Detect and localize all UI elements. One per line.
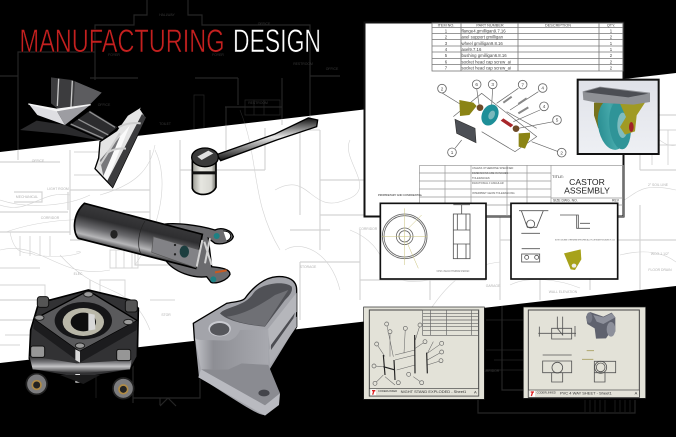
floor plan room labels on white band: BUILDING: [612, 107, 628, 111]
drawing panel: wheel detail: [380, 203, 486, 279]
assembly drawing sheet: PROPRIETARY AND CONFIDENTIAL: [378, 193, 423, 197]
parts table: 2: [610, 60, 613, 64]
diagonal white band: [0, 73, 676, 363]
title block text: CASTOR: [569, 177, 605, 187]
wheel notes: NOTES: UNLESS OTHERWISE SPECIFIED: [437, 271, 470, 273]
balloon numbers: 1: [451, 150, 454, 155]
title block text: SIZE DWG. NO.: [553, 198, 578, 202]
bearing bore: [55, 302, 112, 339]
tool barrel cross hole: [110, 230, 118, 239]
exploded castor view: [438, 80, 566, 157]
floor plan room labels on white band: GARAGE: [486, 284, 501, 288]
bearing mounting holes: [35, 292, 133, 348]
sheet footer: A: [474, 389, 477, 394]
floor plan room labels on white band: STORAGE: [300, 265, 317, 269]
sheet background: [523, 307, 646, 398]
floor plan on white band: [0, 114, 676, 346]
tool barrel: [74, 203, 202, 268]
3D model: long gripper tool: [74, 203, 233, 283]
explosion lines: [440, 88, 558, 152]
balloon numbers: 3: [491, 82, 494, 87]
sheet footer: [369, 389, 479, 396]
balloon numbers: 2: [441, 86, 444, 91]
parts table: 2: [610, 53, 613, 58]
bracket front view: [519, 211, 548, 233]
parts table: QTY.: [607, 24, 615, 28]
title block text: INTERPRET GEOM TOLERANCING: [472, 191, 515, 195]
drawing panel: exploded stand: [364, 307, 484, 399]
floor plan room labels on white band: LIGHT ROOM: [47, 187, 69, 191]
plow blade: [95, 96, 147, 187]
bracket bottom view: [522, 249, 540, 262]
sheet footer: [528, 390, 639, 397]
plow bucket back: [51, 77, 102, 111]
callout balloons: [438, 80, 566, 157]
bushing left: [477, 104, 483, 111]
sheet footer: A: [635, 390, 638, 395]
teal wheel tyre: [595, 98, 631, 152]
teal wheel part: [478, 102, 502, 128]
parts table: 7: [445, 66, 448, 70]
floor plan room labels on white band: 2" SOIL LINE: [648, 183, 669, 187]
bearing wheels: [26, 374, 134, 399]
parts table: 3: [445, 41, 448, 46]
parts table: socket head cap screw_ai: [462, 60, 511, 64]
floor plan room labels on black: HALLWAY: [159, 13, 176, 17]
floor plan room labels on black: CORRIDOR: [481, 369, 500, 373]
red axle: [629, 122, 634, 132]
pipe fitting front view: [543, 355, 572, 382]
ratchet head cylinder: [192, 160, 216, 194]
floor plan room labels on white band: OFFICE: [32, 159, 45, 163]
sheet inner border: [369, 310, 479, 396]
balloon numbers: [441, 82, 563, 155]
floor plan room labels on white band: FLOOR DRAIN: [648, 268, 672, 272]
ratchet handle: [217, 118, 318, 161]
3D model: bearing block: [26, 290, 138, 399]
bracket pocket: [220, 283, 292, 327]
axle support part left: [459, 100, 477, 116]
sheet inner border: [528, 310, 639, 397]
bearing bolts: [31, 297, 137, 361]
left bracket: [594, 103, 610, 129]
title block text: TOLERANCES:: [472, 176, 491, 180]
exploded stand drawing: [374, 324, 442, 385]
title block text: ASSEMBLY: [564, 186, 610, 196]
bracket side ribs: [268, 293, 297, 347]
plow bucket front: [28, 103, 65, 125]
sheet footer: PVC 4 WAY SHEET - Sheet1: [560, 390, 612, 395]
yellow bracket render: [564, 249, 581, 270]
balloon numbers: 4: [541, 86, 544, 91]
title block text: [472, 166, 620, 202]
title block text: UNLESS OTHERWISE SPECIFIED:: [472, 166, 514, 170]
red axle part: [501, 118, 513, 127]
sheet background: [364, 307, 484, 399]
parts table: 1: [445, 28, 448, 34]
socket screws: [503, 97, 528, 113]
bracket front walls: [195, 329, 268, 369]
title block text: REV: [612, 198, 620, 202]
floor plan room labels on white band: [16, 107, 672, 317]
bracket body: [193, 277, 297, 416]
parts table: 2: [445, 34, 448, 40]
balloon numbers: 5: [556, 118, 559, 123]
pipe fitting render: [586, 312, 615, 339]
wheel centerlines: [382, 208, 427, 268]
balloon numbers: 2: [560, 150, 563, 155]
title block: [419, 165, 624, 216]
parts table: flange4.gmilligan9.7.16: [462, 28, 506, 34]
top plate: [583, 87, 650, 105]
parts table: [432, 23, 623, 71]
bearing lower plate: [29, 290, 138, 378]
balloon numbers: 7: [521, 82, 524, 87]
drawing panel: PVC 4-way sheet: [523, 307, 646, 398]
title block text: TITLE:: [552, 174, 564, 179]
top plate part: [455, 119, 476, 143]
title block text: DIMENSIONS ARE IN INCHES: [472, 171, 508, 175]
balloon numbers: 4: [543, 104, 546, 109]
panel frame: [380, 203, 486, 279]
floor plan room labels on black: TOILET: [159, 122, 171, 126]
floor plan room labels on black: RESTROOM: [293, 62, 313, 66]
tool collar wings: [163, 224, 233, 283]
parts table: bushing gmilligan6.8.16: [462, 53, 507, 58]
parts table: wheel gmilligan9.8.16: [462, 41, 503, 46]
parts table: 2: [610, 66, 613, 70]
axle support part right: [519, 133, 530, 149]
floor plan room labels on black: RESTROOM: [248, 101, 268, 105]
tool jaw links: [197, 238, 212, 267]
drawing panel: bracket detail: [511, 203, 618, 279]
floor plan room labels on white band: STOR: [161, 313, 171, 317]
floor plan room labels on white band: WCO-1 1/2": [651, 252, 670, 256]
title: [20, 23, 321, 59]
assembly drawing sheet: [364, 22, 624, 216]
balloon numbers: 6: [475, 82, 478, 87]
floor plan room labels on white band: MECHANICAL: [16, 195, 38, 199]
proprietary note: [377, 192, 419, 203]
bracket base top: [201, 363, 280, 405]
parts table: 1: [610, 28, 613, 34]
tool jaw pins: [214, 233, 220, 239]
floor plan room labels on black: OFFICE: [98, 103, 111, 107]
parts table: axel9.7.16: [462, 47, 482, 52]
pipe fitting side view: [594, 361, 616, 382]
floor plan room labels on white band: CORRIDOR: [41, 216, 60, 220]
floor plan room labels on black: OFFICE: [258, 22, 271, 26]
floor plan room labels on black: OFFICE: [326, 67, 339, 71]
plow shadow: [20, 121, 102, 141]
floor plan room labels on white band: ELEC: [74, 272, 83, 276]
wheel front view: [382, 214, 427, 259]
pipe fitting top view: [538, 317, 576, 339]
floor plan room labels on white band: CORRIDOR: [359, 227, 378, 231]
floor plan room labels on black: [98, 13, 500, 373]
tool face plate: [152, 237, 200, 268]
parts table: 1: [610, 47, 613, 52]
parts table: 6: [445, 60, 448, 64]
parts table: 2: [610, 34, 613, 40]
inset frame: [578, 80, 659, 154]
3D model: plow attachment: [20, 77, 147, 187]
plow arms: [70, 111, 117, 139]
parts table: 5: [445, 53, 448, 58]
bracket note: NOTE: UNLESS OTHERWISE SPECIFIED ALL FILLETS ARE ROUNDED R .125: [555, 238, 616, 241]
bill of materials: [423, 310, 478, 335]
parts table: DESCRIPTION: [545, 24, 571, 28]
bracket hole: [208, 321, 231, 336]
3D model: grey bracket: [193, 277, 297, 416]
floor plan room labels on black: FOYER: [212, 53, 224, 57]
sheet paper: [364, 22, 624, 216]
inset: rendered castor: [578, 80, 659, 154]
title word: design: DESIGN: [233, 23, 321, 59]
ratchet head top: [192, 148, 218, 167]
parts table: axel support gmilligan: [462, 34, 504, 40]
sheet footer: CODERLINKED: [537, 390, 556, 394]
bracket base front edge: [198, 369, 280, 416]
panel frame: [511, 203, 618, 279]
bracket foot hole: [258, 390, 270, 396]
wheel section view: [453, 205, 470, 259]
parts table: 4: [445, 47, 448, 52]
sheet footer: CODERLINKED: [378, 389, 397, 393]
floor plan room labels on black: FOYER: [108, 53, 120, 57]
bushing right: [513, 125, 519, 132]
dimension marks: [582, 351, 594, 359]
title word: manufacturing: MANUFACTURING: [20, 23, 224, 59]
parts table: PART NUMBER: [476, 24, 504, 28]
bracket side view: [560, 215, 590, 228]
bearing upper plate: [34, 291, 137, 352]
parts table: ITEM NO.: [438, 24, 454, 28]
title block text: FRACTIONAL ± ANGULAR: [472, 181, 504, 185]
3D model: ratchet wrench: [192, 118, 318, 194]
sheet footer: NIGHT STAND EXPLODED - Sheet1: [401, 389, 467, 394]
floor plan room labels on white band: WALL ELEVATION: [549, 290, 578, 294]
parts table: 1: [610, 41, 613, 46]
parts table: socket head cap screw_ai: [462, 66, 511, 70]
right bracket: [620, 103, 645, 135]
floor plan room labels on white band: ELEVATOR: [391, 242, 409, 246]
